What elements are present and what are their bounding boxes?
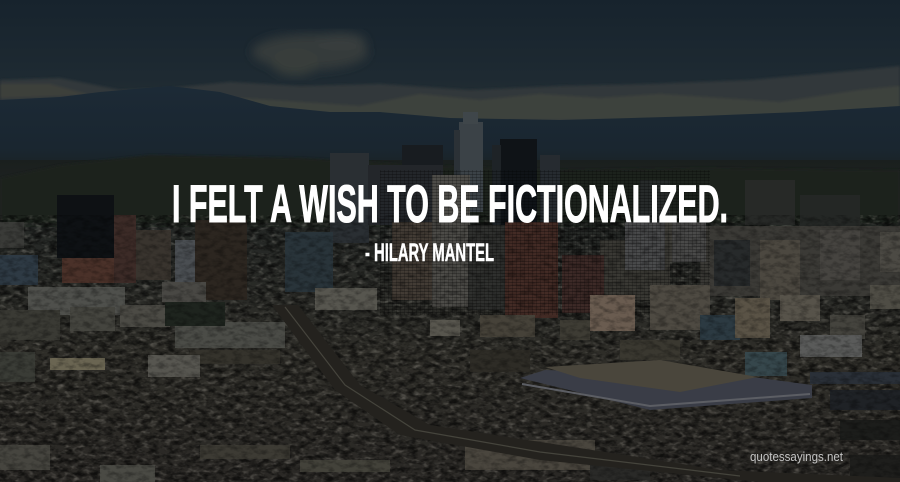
left red base [62, 258, 114, 283]
far blocks [0, 180, 900, 300]
dark foothills [0, 86, 900, 175]
dark specks [0, 215, 900, 482]
sky [0, 0, 900, 130]
watermark: quotessayings.net [750, 450, 843, 464]
central white tower [454, 112, 483, 212]
roof [545, 360, 758, 392]
distant hill [0, 155, 900, 225]
right dark tower [714, 240, 750, 286]
window grid [380, 170, 710, 315]
navy tower [285, 232, 333, 292]
brown tower [195, 220, 247, 300]
side wall [520, 370, 812, 410]
left grey tower [175, 240, 197, 282]
texture: rooftops and streets [0, 215, 900, 482]
mid dark towers [368, 165, 443, 225]
snowy mountains [0, 66, 900, 140]
left maroon tower [114, 215, 136, 283]
left black skyscraper [57, 195, 114, 258]
skyscrapers [0, 112, 900, 318]
left slate block [0, 255, 38, 285]
city ground [0, 160, 900, 482]
red-brown skyscraper [505, 222, 558, 318]
left white block [28, 287, 125, 315]
freeway lanes [285, 307, 740, 476]
mid right tower [468, 225, 505, 310]
dark block tower [402, 145, 443, 175]
freeway [272, 305, 900, 482]
light specks [0, 215, 900, 482]
convention centre [520, 360, 812, 410]
tan grid tower [392, 222, 432, 300]
wall stripes [522, 384, 810, 406]
fine overall grain [0, 215, 900, 482]
maroon building [562, 255, 604, 313]
black skyscraper [500, 139, 537, 229]
tall grey tower [330, 153, 369, 243]
clouds [252, 33, 368, 76]
light grey tower [432, 175, 470, 307]
mid-ground blocks [0, 285, 900, 482]
author attribution: - HILARY MANTEL [365, 239, 494, 267]
right pale tower [625, 222, 665, 270]
